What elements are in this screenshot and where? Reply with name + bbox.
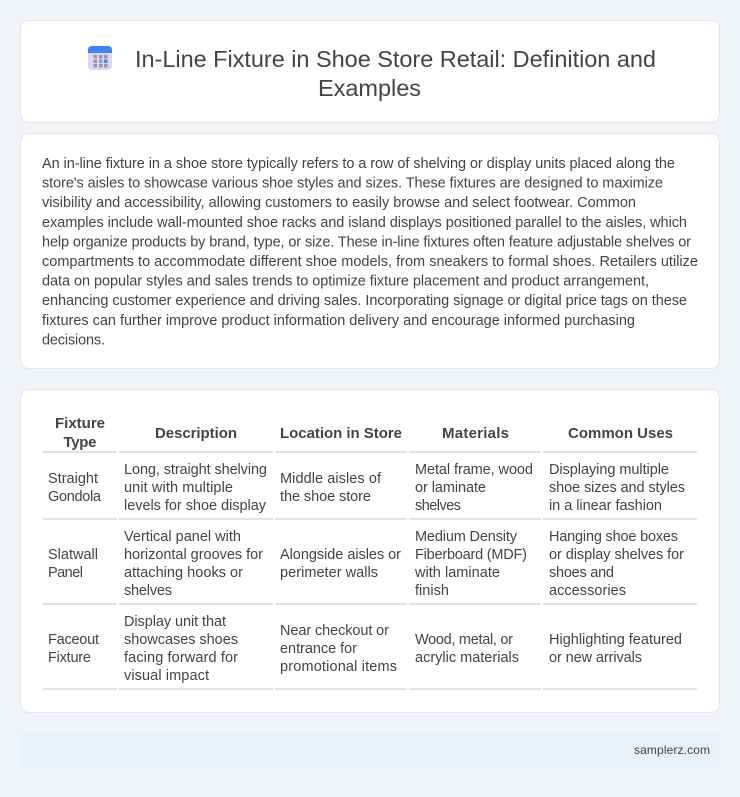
table row: Slatwall Panel [43, 529, 697, 605]
table header: Location in Store [280, 425, 402, 442]
table row: Straight Gondola: Straight [48, 471, 98, 487]
text block: definition: data on popular styles and sales trends to optimize fixture placement and product arrangement, [42, 274, 649, 290]
title: Examples [318, 75, 421, 101]
table header: Materials [442, 425, 509, 442]
table row: Straight Gondola: Gondola [48, 489, 102, 505]
table row: Straight Gondola: shoe sizes and styles [549, 480, 685, 496]
table header: Common Uses [568, 425, 673, 442]
text block: definition [42, 156, 698, 348]
table row: Straight Gondola: or laminate [415, 480, 486, 496]
table row: Straight Gondola: shelves [415, 498, 461, 514]
table row: Slatwall Panel: shelves [124, 583, 172, 599]
panel: title card [20, 20, 720, 122]
icon: calendar [88, 46, 112, 70]
table row: Faceout Fixture: visual impact [124, 668, 209, 684]
table row: Straight Gondola [43, 462, 697, 520]
table row: Faceout Fixture: Highlighting featured [549, 632, 682, 648]
footer bar [20, 733, 720, 767]
panel: intro paragraph [20, 134, 720, 368]
table row: Faceout Fixture: Display unit that [124, 614, 226, 630]
table row: Faceout Fixture: entrance for [280, 641, 357, 657]
table row: Straight Gondola: Displaying multiple [549, 462, 669, 478]
table row: Slatwall Panel: Hanging shoe boxes [549, 529, 678, 545]
table row: Slatwall Panel: Slatwall [48, 547, 98, 563]
text block: definition: help organize products by brand, type, or size. These in-line fixtures often feature adjustable shelves or [42, 234, 691, 250]
table row: Slatwall Panel: Vertical panel with [124, 529, 241, 545]
table row: Slatwall Panel: finish [415, 583, 449, 599]
title: In-Line Fixture in Shoe Store Retail: Definition and [135, 46, 656, 72]
footer bar: samplerz.com [634, 743, 710, 757]
text block: definition: fixtures can further improve product information delivery and encourage informed purchasing [42, 313, 635, 329]
table header: Type [64, 434, 96, 451]
table row: Slatwall Panel: horizontal grooves for [124, 547, 263, 563]
table row: Slatwall Panel: Panel [48, 565, 83, 581]
text block: definition: enhancing customer experience and driving sales. Incorporating signage or digital price tags on these [42, 293, 687, 309]
table row: Faceout Fixture: Fixture [48, 650, 91, 666]
table row: Slatwall Panel: or display shelves for [549, 547, 684, 563]
table header: Fixture [55, 415, 105, 432]
table row: Straight Gondola: the shoe store [280, 489, 371, 505]
table row: Straight Gondola: unit with multiple [124, 480, 233, 496]
table header: Description [155, 425, 237, 442]
text block: definition: compartments to accommodate different shoe models, from sneakers to formal shoes. Retailers utilize [42, 254, 698, 270]
table row: Straight Gondola: in a linear fashion [549, 498, 662, 514]
table row: Slatwall Panel: accessories [549, 583, 626, 599]
text block: definition: decisions. [42, 332, 105, 348]
table row: Straight Gondola: Middle aisles of [280, 471, 382, 487]
table row: Straight Gondola: levels for shoe display [124, 498, 267, 514]
table row: Faceout Fixture: or new arrivals [549, 650, 642, 666]
table row: Straight Gondola: Long, straight shelving [124, 462, 267, 478]
text block: definition: examples include wall-mounted shoe racks and island displays positioned parallel to the aisles, which [42, 215, 687, 231]
table header [43, 415, 697, 453]
table row: Faceout Fixture: showcases shoes [124, 632, 238, 648]
text block: definition: An in-line fixture in a shoe store typically refers to a row of shelving or display units placed along the [42, 156, 675, 172]
table row: Slatwall Panel: shoes and [549, 565, 614, 581]
text block: definition: store's aisles to showcase various shoe styles and sizes. These fixtures are designed to maximize [42, 176, 663, 192]
table row: Faceout Fixture: Wood, metal, or [415, 632, 513, 648]
table row: Straight Gondola: Metal frame, wood [415, 462, 533, 478]
table row: Slatwall Panel: attaching hooks or [124, 565, 243, 581]
table row: Slatwall Panel: Alongside aisles or [280, 547, 401, 563]
table row: Slatwall Panel: with laminate [414, 565, 500, 581]
table row: Faceout Fixture: Near checkout or [280, 623, 389, 639]
text block: definition: visibility and accessibility, allowing customers to easily browse and select footwear. Common [42, 195, 636, 211]
table row: Slatwall Panel: Medium Density [415, 529, 518, 545]
table row: Faceout Fixture: promotional items [280, 659, 397, 675]
title [135, 46, 656, 101]
table row: Slatwall Panel: perimeter walls [280, 565, 378, 581]
table row: Faceout Fixture: Faceout [48, 632, 99, 648]
table row: Faceout Fixture: facing forward for [124, 650, 238, 666]
table row: Slatwall Panel: Fiberboard (MDF) [415, 547, 527, 563]
table row: Faceout Fixture [43, 614, 697, 690]
panel: fixture table [20, 390, 720, 712]
table row: Faceout Fixture: acrylic materials [415, 650, 519, 666]
